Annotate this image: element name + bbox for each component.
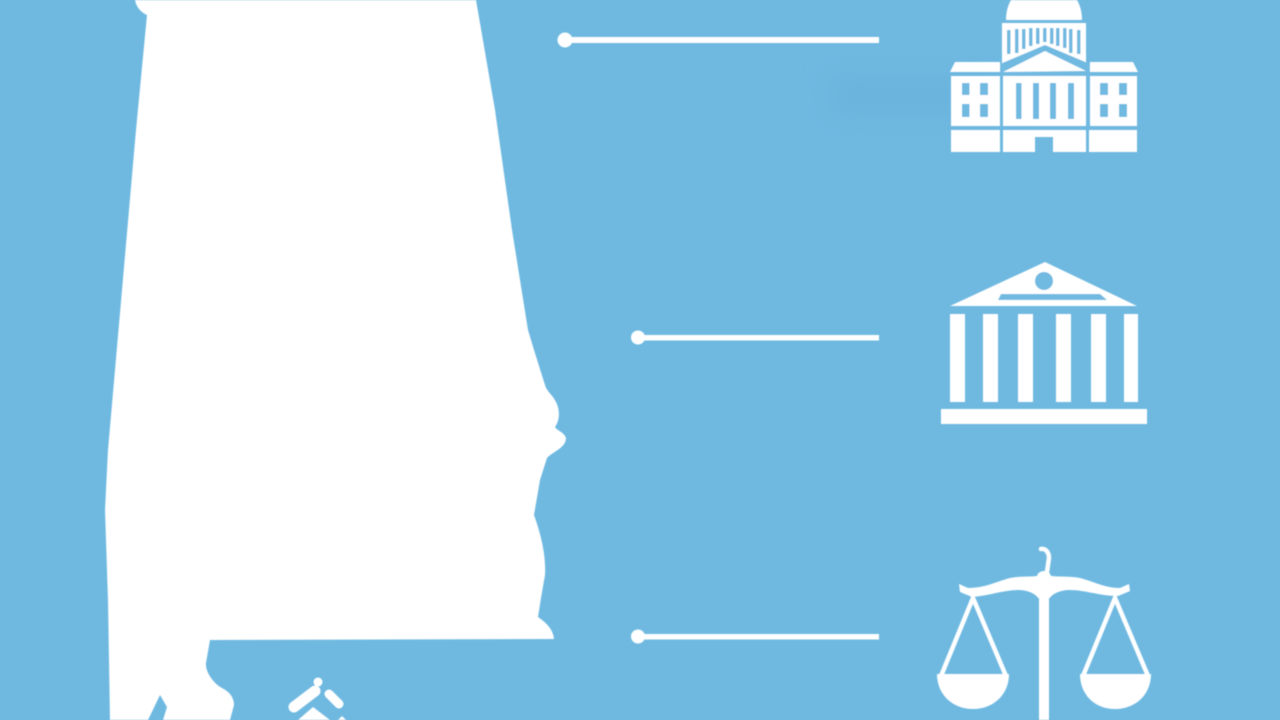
icon: capitol building — [950, 0, 1138, 152]
icon: gavel fragment — [294, 678, 346, 720]
connector: bottom line — [631, 630, 879, 644]
map: silhouette of Alabama — [105, 0, 566, 720]
connector: top line — [558, 32, 879, 48]
icon: scales of justice — [937, 549, 1151, 720]
connector: middle line — [631, 330, 879, 344]
icon: courthouse with columns — [941, 262, 1147, 424]
